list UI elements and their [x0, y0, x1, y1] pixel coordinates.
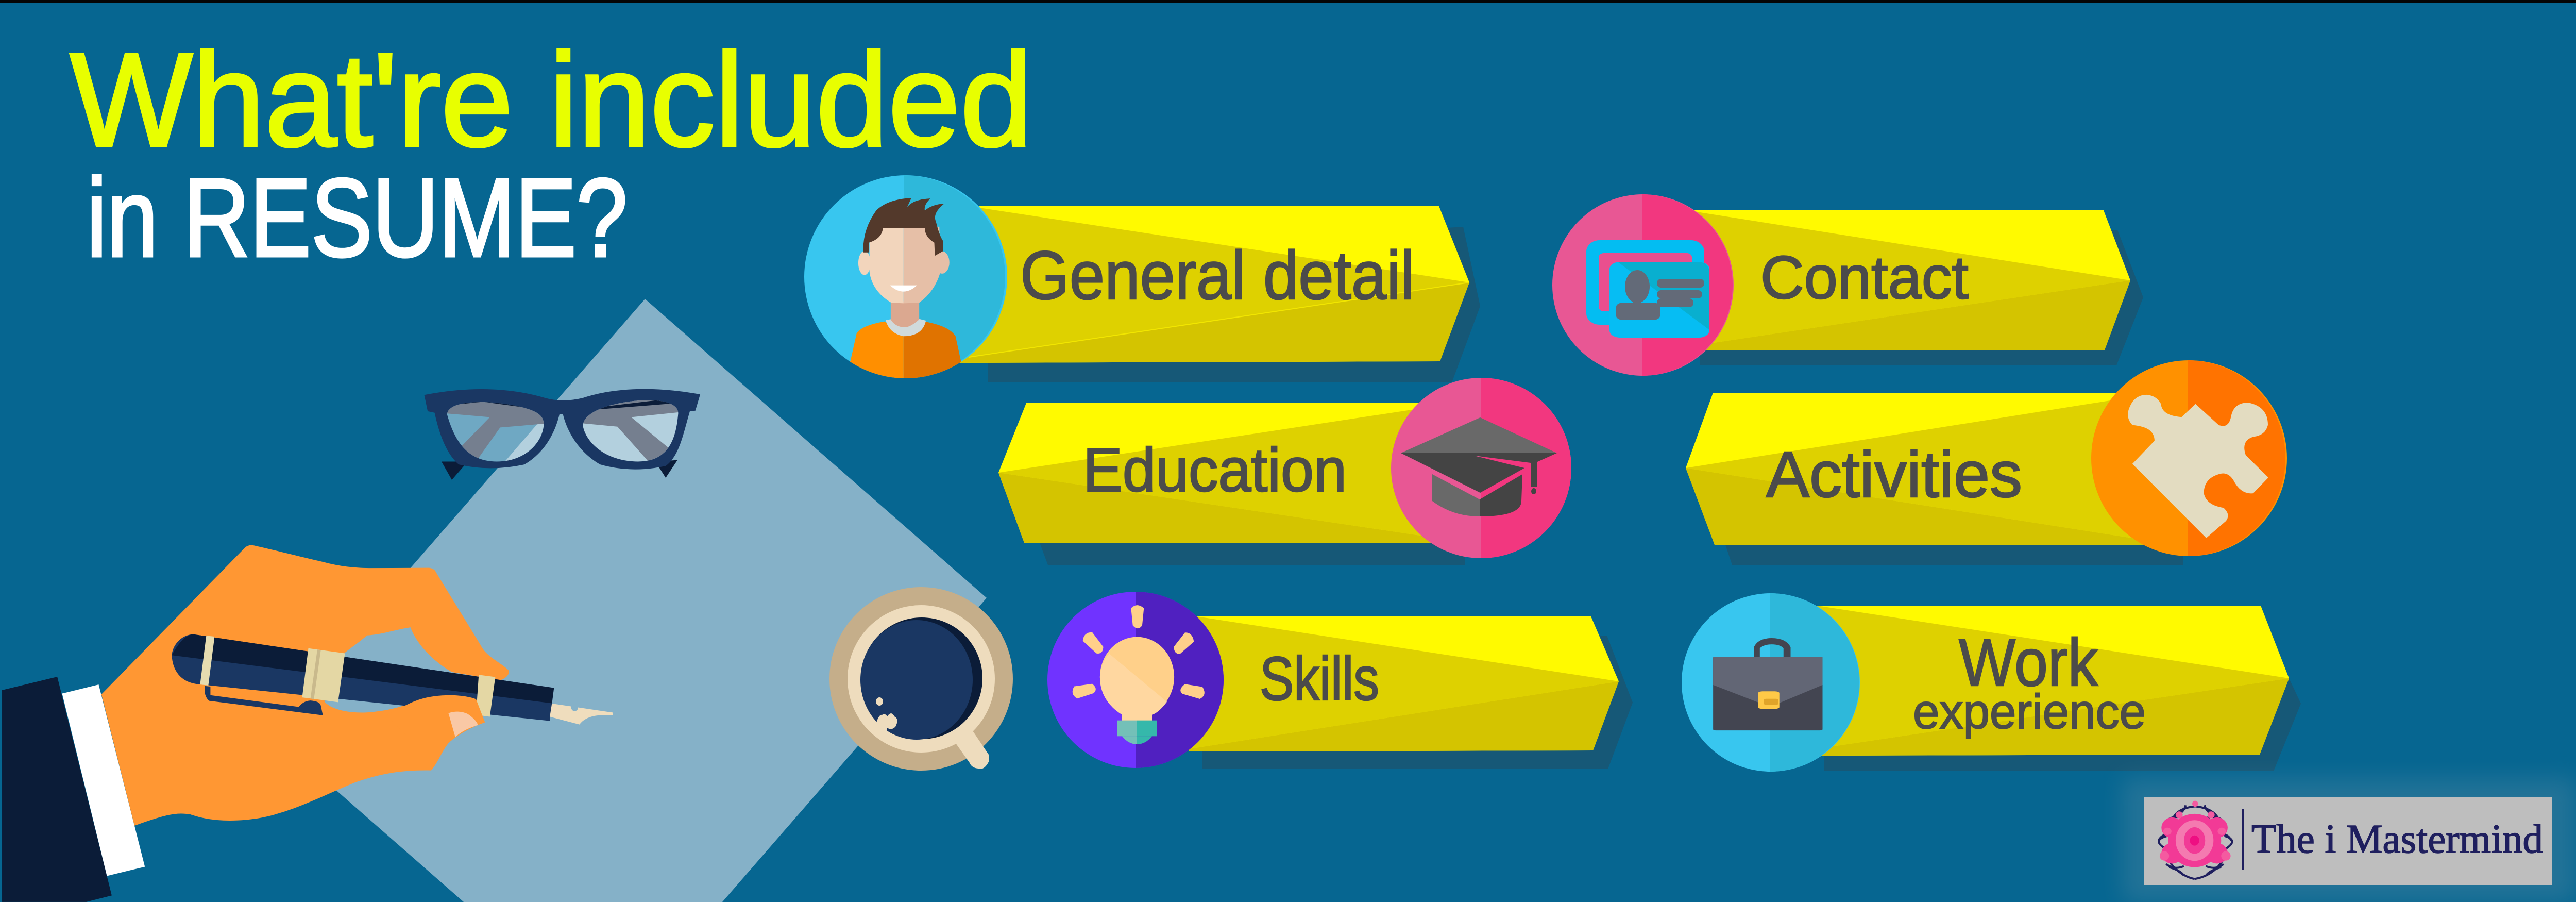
logo: The i Mastermind	[2123, 778, 2576, 902]
cup handle	[956, 731, 989, 769]
title: What're included	[70, 25, 1032, 174]
icon: id card	[1552, 194, 1734, 376]
panel: contact	[1552, 194, 2143, 376]
icon: briefcase	[1682, 593, 1860, 772]
panel: skills	[1047, 592, 1633, 769]
labels: experience	[1913, 684, 2146, 739]
labels	[1913, 625, 2146, 739]
sleeve	[2, 677, 112, 902]
icon: mandala	[2159, 801, 2232, 879]
label: Education	[1083, 436, 1347, 505]
icon: puzzle piece	[2091, 360, 2287, 556]
icon: light bulb	[1047, 592, 1224, 768]
panel: education	[998, 378, 1571, 565]
hand holding a pen	[2, 545, 613, 902]
paper sheet	[268, 299, 987, 902]
title: in RESUME?	[87, 155, 628, 280]
panel: work experience	[1682, 593, 2301, 772]
label: Skills	[1260, 644, 1379, 713]
panel: general detail	[804, 175, 1480, 382]
label: Contact	[1760, 244, 1969, 312]
title	[70, 25, 1032, 280]
icon: graduation cap	[1391, 378, 1571, 558]
pen	[172, 634, 613, 725]
thumb	[386, 695, 485, 743]
label: General detail	[1020, 238, 1415, 314]
logo text: The i Mastermind	[2251, 817, 2543, 862]
panel: activities	[1686, 360, 2287, 565]
thumbnail	[448, 712, 478, 737]
icon: coffee cup	[829, 587, 1013, 771]
icon: avatar	[804, 175, 1007, 381]
label: Activities	[1766, 438, 2022, 511]
icon: glasses	[424, 389, 700, 480]
hand	[101, 545, 509, 826]
cuff	[62, 684, 145, 876]
labels: Work	[1959, 625, 2098, 700]
